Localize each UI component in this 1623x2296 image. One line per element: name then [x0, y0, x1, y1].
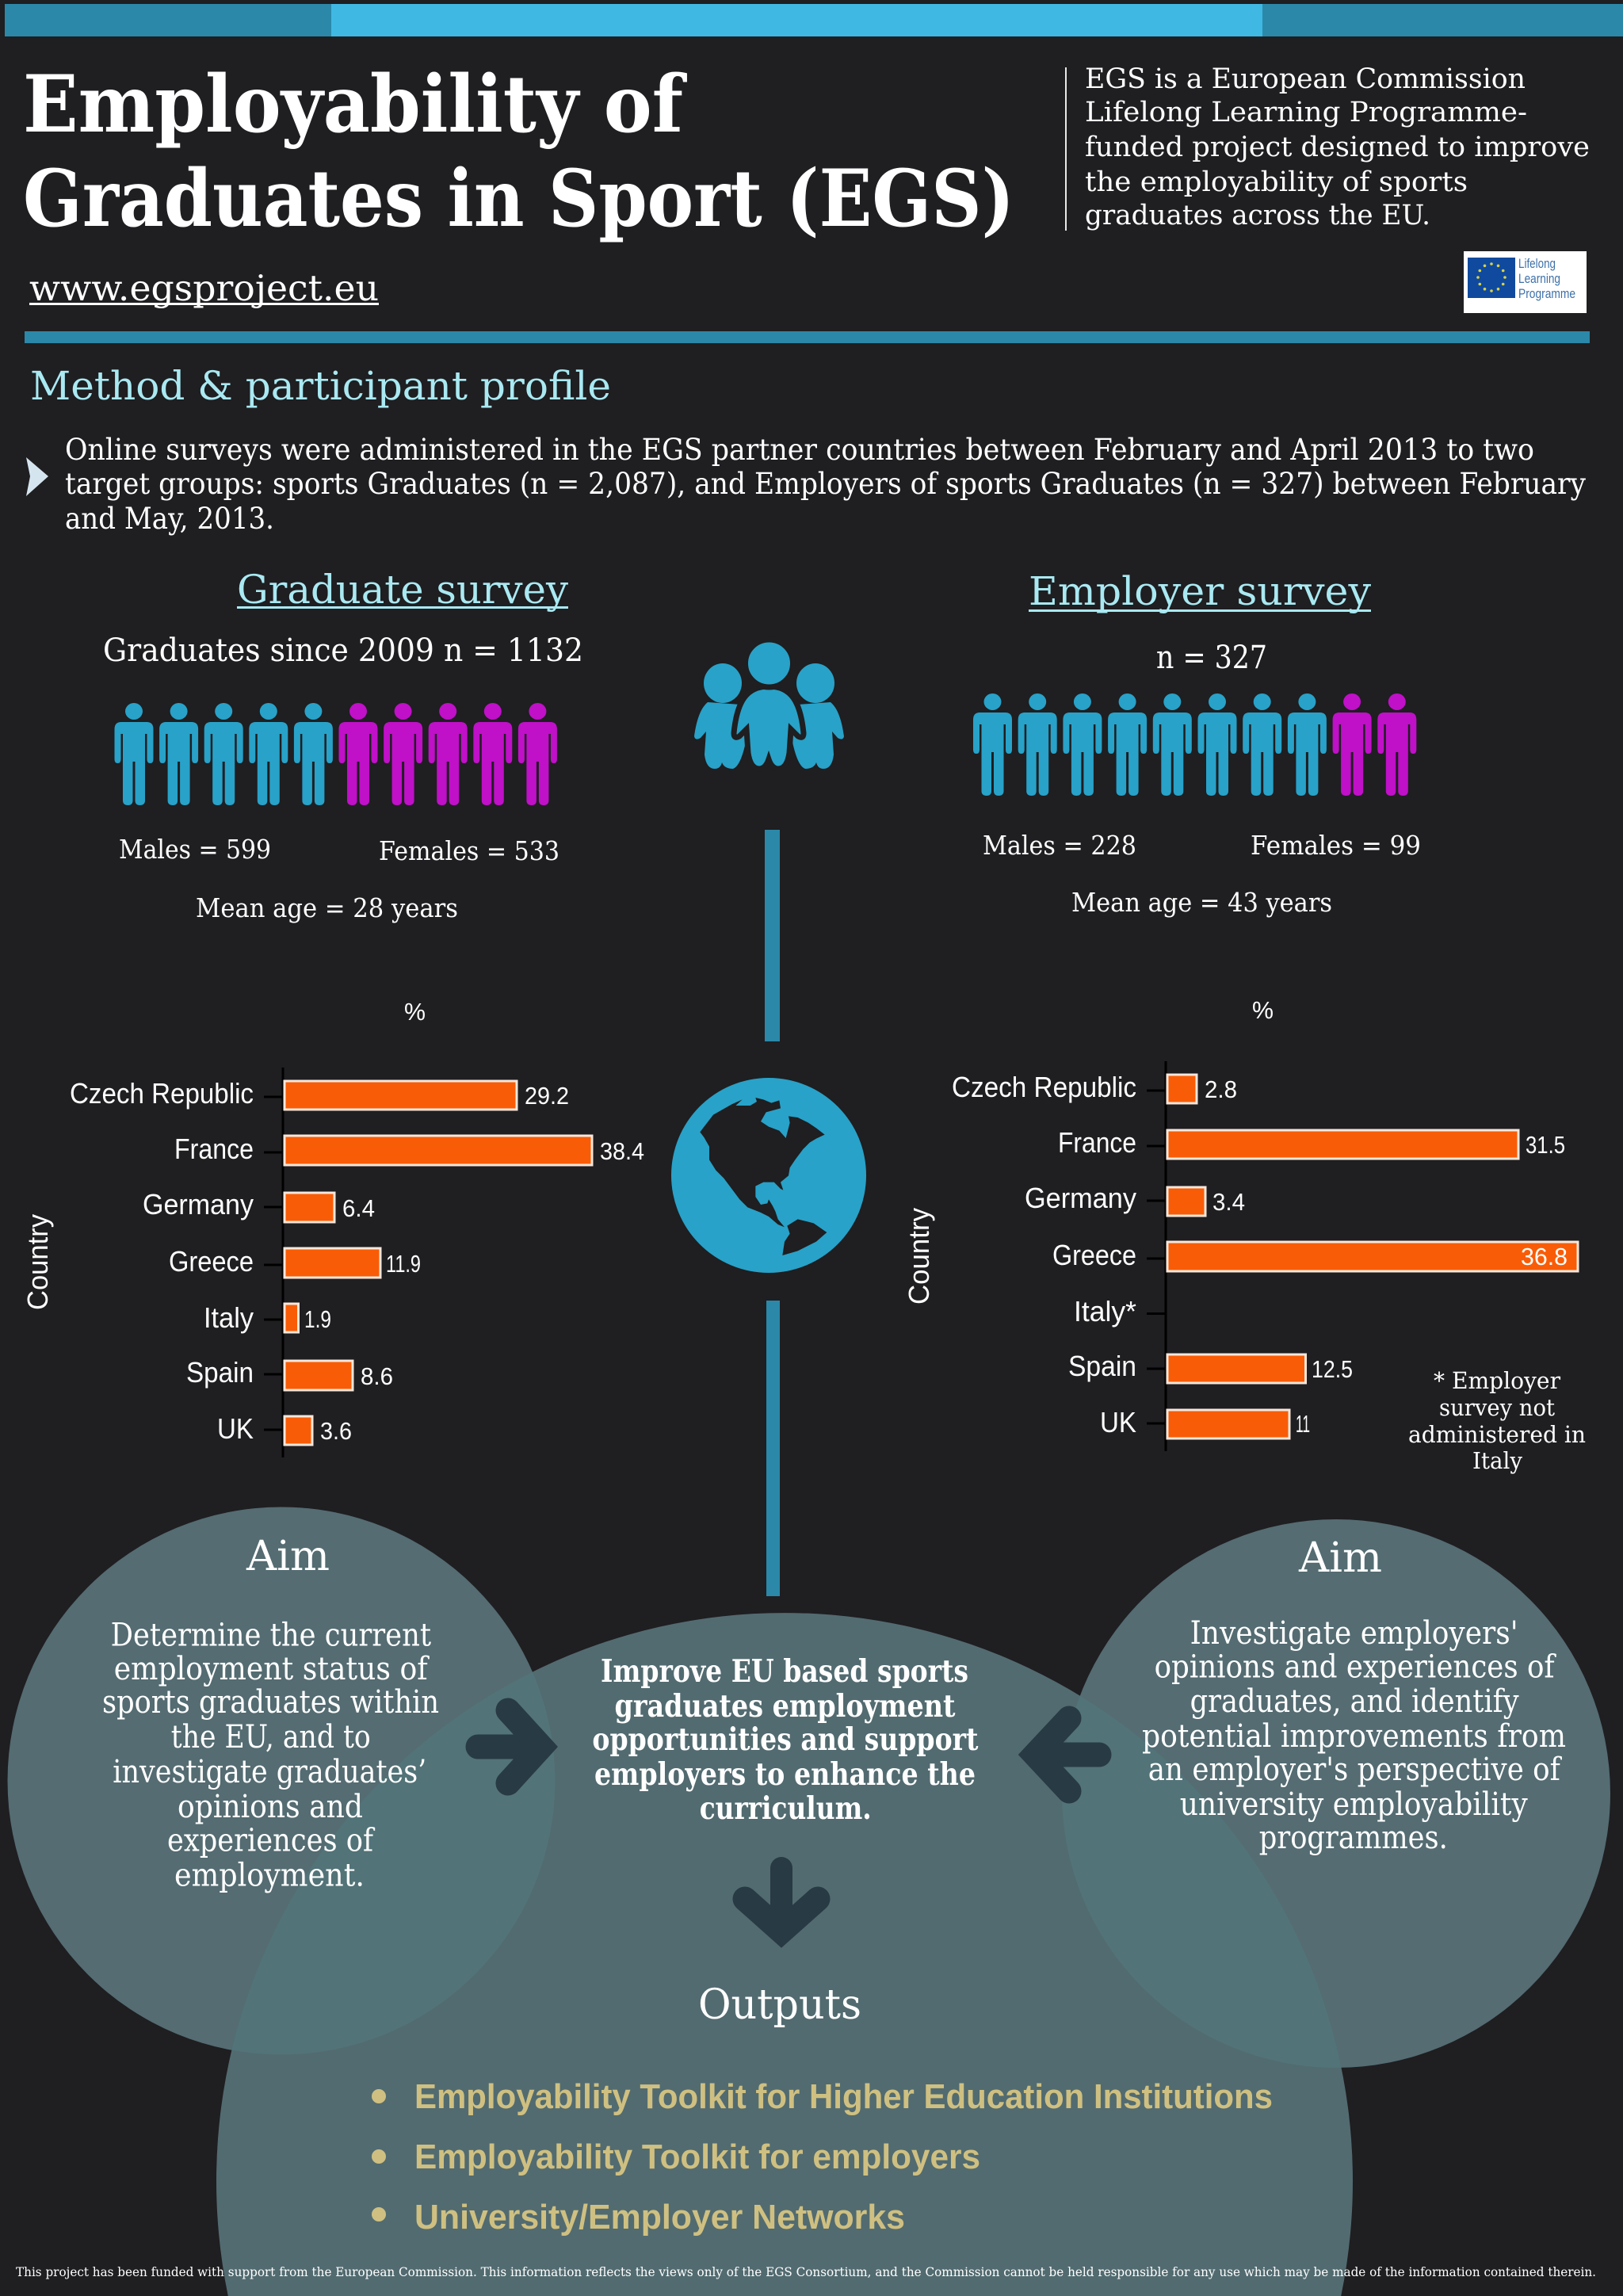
employer demographics: Mean age = 43 years [1071, 887, 1332, 918]
bar chart: employers by country: UK [1100, 1406, 1136, 1438]
footnote: Italy: survey not [1439, 1394, 1555, 1421]
arrow: right, into central goal [478, 1710, 541, 1783]
bar chart: graduates by country: 6.4 [342, 1194, 375, 1222]
bar chart: graduates by country: Greece [169, 1245, 254, 1278]
project description [1065, 63, 1590, 231]
arrow: down, to outputs [745, 1868, 818, 1931]
employer sample size: n = 327 [1156, 640, 1267, 676]
bar chart: graduates by country: France [174, 1133, 254, 1165]
bar chart: employers by country: Germany [1025, 1182, 1136, 1214]
logo: Lifelong Learning Programme: Learning [1518, 271, 1560, 286]
bar chart: employers by country: 3.4 [1212, 1188, 1245, 1216]
text: employer aim [1142, 1534, 1566, 1856]
title: Graduates in Sport (EGS) [23, 153, 1014, 245]
text: central goal: curriculum. [700, 1790, 872, 1827]
bar chart: graduates by country: 8.6 [361, 1362, 393, 1390]
footnote: Italy: Italy [1472, 1447, 1523, 1474]
footnote: Italy: * Employer [1434, 1367, 1560, 1394]
bar chart: employers by country: 36.8 [1521, 1243, 1568, 1270]
method paragraph [26, 433, 1586, 536]
bar chart: employers by country: 11 [1296, 1410, 1310, 1438]
bar chart: employers by country: Czech Republic [952, 1071, 1136, 1103]
bar chart: employers by country: Greece [1052, 1239, 1136, 1271]
logo: Lifelong Learning Programme: Lifelong [1518, 256, 1556, 271]
bar chart: graduates by country: 11.9 [386, 1250, 421, 1278]
project description: funded project designed to improve [1085, 132, 1590, 163]
bar chart: employers by country [903, 996, 1578, 1451]
bar chart: graduates by country: Country [21, 1214, 54, 1310]
text: graduate aim: opinions and [178, 1789, 363, 1825]
heading: outputs: Outputs [698, 1981, 861, 2029]
text: employer aim: graduates, and identify [1190, 1683, 1519, 1720]
project description: the employability of sports [1085, 166, 1468, 198]
employer demographics [983, 830, 1421, 918]
pictogram: graduate gender split [114, 703, 557, 805]
heading: employer survey: Employer survey [1029, 568, 1372, 614]
arrow: left, into central goal [1035, 1718, 1099, 1791]
outputs list: Employability Toolkit for employers [414, 2137, 980, 2176]
top banner bar [5, 4, 1623, 36]
bar chart: employers by country: Country [903, 1208, 935, 1305]
project description: Lifelong Learning Programme- [1085, 97, 1527, 128]
heading: graduate survey: Graduate survey [237, 567, 569, 613]
bar chart: employers by country: 12.5 [1312, 1355, 1353, 1383]
bar chart: graduates by country: Czech Republic [70, 1077, 254, 1110]
bar chart: graduates by country: Spain [186, 1356, 254, 1389]
text: employer aim: an employer's perspective of [1148, 1752, 1563, 1788]
bar chart: employers by country: Italy* [1074, 1295, 1136, 1328]
text: graduate aim: the EU, and to [171, 1719, 371, 1755]
text: employer aim: Aim [1298, 1534, 1382, 1582]
bar chart: graduates by country: % [404, 998, 426, 1026]
bar chart: graduates by country [21, 998, 644, 1457]
bar chart: graduates by country: Italy [204, 1301, 254, 1334]
circle: graduate aim [8, 1507, 555, 2054]
text: graduate aim: Aim [246, 1533, 330, 1580]
footnote: Italy: administered in [1408, 1421, 1586, 1448]
bar chart: graduates by country: Germany [143, 1188, 254, 1221]
circle: employer aim [1062, 1519, 1610, 2068]
connector bar: lower [766, 1301, 780, 1596]
bar chart: employers by country: France [1058, 1126, 1136, 1159]
text: employer aim: potential improvements from [1142, 1718, 1566, 1755]
bar chart: employers by country: % [1252, 996, 1274, 1024]
connector bar: upper [765, 830, 780, 1041]
graduate demographics [119, 834, 559, 923]
text: central goal [592, 1653, 978, 1827]
circle overlaps [231, 1696, 1339, 2057]
logo: Lifelong Learning Programme [1464, 251, 1587, 313]
outputs list [372, 2077, 1273, 2237]
icon: globe [671, 1078, 866, 1273]
circle: central goal and outputs [216, 1613, 1353, 2296]
bar chart: graduates by country: 3.6 [320, 1417, 352, 1445]
text: central goal: opportunities and support [592, 1721, 978, 1758]
bar chart: employers by country: 31.5 [1526, 1131, 1565, 1159]
text: graduate aim: Determine the current [111, 1617, 431, 1653]
graduates sample size: Graduates since 2009 n = 1132 [103, 632, 583, 669]
bar chart: employers by country: Spain [1068, 1350, 1136, 1382]
project description: graduates across the EU. [1085, 200, 1430, 231]
text: graduate aim: employment. [174, 1858, 365, 1894]
title [23, 59, 1014, 245]
graduate demographics: Males = 599 [119, 834, 271, 865]
text: graduate aim [102, 1533, 439, 1894]
bar chart: graduates by country: 1.9 [304, 1305, 331, 1333]
text: employer aim: university employability [1180, 1786, 1528, 1823]
employer demographics: Females = 99 [1251, 830, 1421, 861]
outputs list: Employability Toolkit for Higher Education Institutions [414, 2077, 1273, 2116]
method paragraph: Online surveys were administered in the EGS partner countries between February and April 2013 to two [65, 433, 1534, 467]
bar chart: graduates by country: UK [217, 1412, 254, 1445]
text: central goal: Improve EU based sports [601, 1653, 968, 1690]
website link: www.egsproject.eu [29, 267, 379, 309]
graduate demographics: Females = 533 [379, 835, 559, 866]
outputs list: University/Employer Networks [414, 2198, 905, 2237]
text: central goal: employers to enhance the [594, 1756, 976, 1793]
title: Employability of [23, 59, 687, 151]
employer demographics: Males = 228 [983, 830, 1136, 861]
logo: Lifelong Learning Programme: Programme [1518, 286, 1575, 301]
section divider [25, 331, 1590, 343]
text: central goal: graduates employment [615, 1688, 956, 1725]
pictogram: employer gender split [973, 693, 1416, 796]
graduate demographics: Mean age = 28 years [196, 892, 458, 923]
bar chart: employers by country: 2.8 [1205, 1075, 1237, 1103]
method paragraph: and May, 2013. [65, 502, 274, 536]
text: employer aim: opinions and experiences of [1155, 1648, 1556, 1685]
text: graduate aim: employment status of [114, 1651, 430, 1687]
text: graduate aim: investigate graduates’ [113, 1754, 426, 1790]
text: graduate aim: experiences of [167, 1823, 376, 1859]
text: employer aim: Investigate employers' [1190, 1615, 1518, 1652]
footnote: Italy [1408, 1367, 1586, 1474]
bar chart: graduates by country: 29.2 [525, 1082, 569, 1110]
icon: group of people [694, 640, 844, 769]
bar chart: graduates by country: 38.4 [600, 1137, 644, 1165]
project description: EGS is a European Commission [1085, 63, 1526, 95]
text: graduate aim: sports graduates within [102, 1684, 439, 1721]
heading: method and participant profile: Method & participant profile [30, 363, 611, 409]
text: employer aim: programmes. [1259, 1820, 1448, 1856]
